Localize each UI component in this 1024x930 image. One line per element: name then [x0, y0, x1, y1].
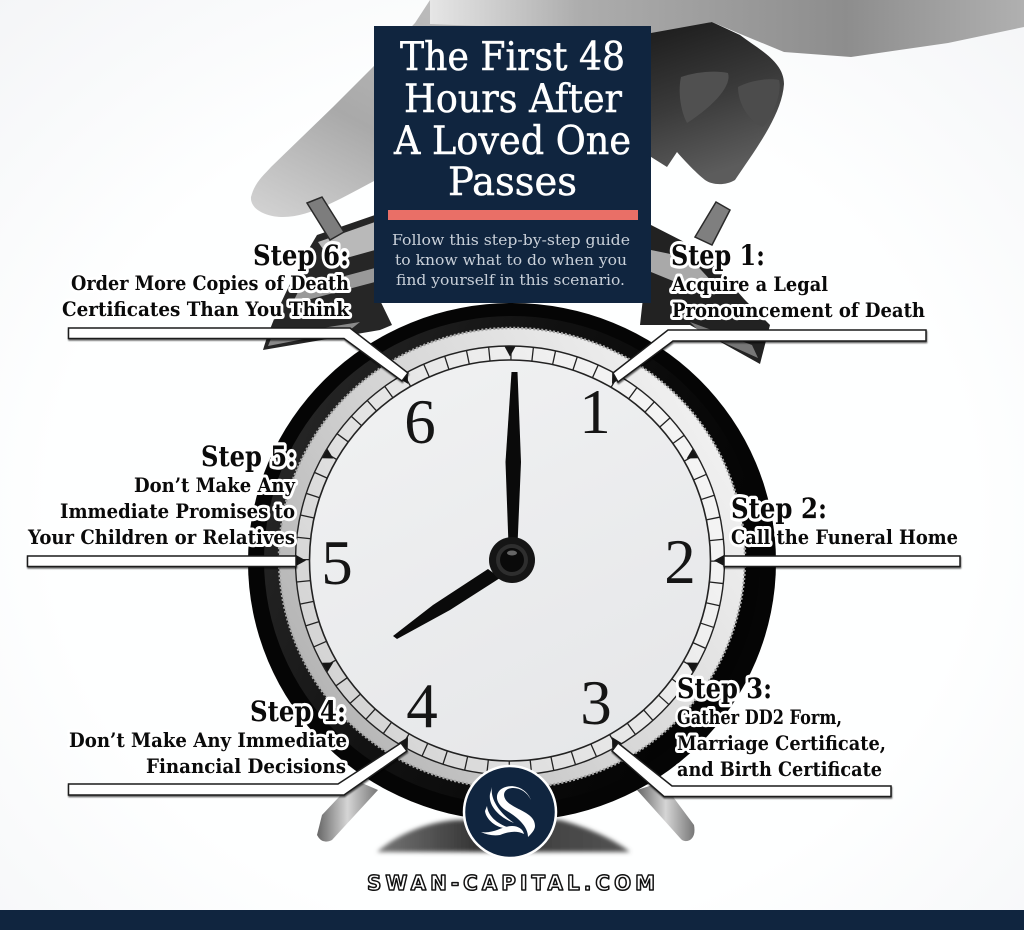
clock inner dark band: [264, 316, 760, 804]
step 2: Step 2:: [731, 492, 827, 525]
clock shadow: [377, 820, 630, 852]
fingers: [640, 22, 784, 184]
step 3: Step 3:: [677, 672, 772, 705]
website URL: SWAN-CAPITAL.COM: [367, 871, 655, 895]
step 3: Gather DD2 Form,: [677, 706, 842, 729]
step 6: Order More Copies of Death: [71, 272, 349, 295]
step 4: Financial Decisions: [146, 755, 346, 778]
clock foot left: [317, 780, 378, 842]
arrow: step 5: [28, 556, 296, 566]
clock outer black ring: [248, 303, 776, 821]
step 3: and Birth Certificate: [677, 758, 882, 781]
minute hand: [506, 372, 521, 545]
step 1: Pronouncement of Death: [672, 299, 925, 322]
title text: [393, 35, 631, 205]
red divider: [388, 210, 638, 220]
logo badge: [464, 766, 556, 858]
step 5: Immediate Promises to: [60, 500, 295, 523]
bell body: [263, 215, 392, 350]
numerals: 1: [579, 377, 611, 447]
step 6: [62, 239, 408, 381]
arm: [430, 0, 1024, 57]
title text: The First 48: [400, 35, 625, 80]
numerals: 4: [406, 671, 438, 741]
step 5: [27, 440, 296, 566]
numerals: 6: [404, 387, 436, 457]
tick track: [296, 346, 724, 775]
step 5: Your Children or Relatives: [27, 526, 295, 549]
arrow: step 4: [68, 743, 407, 795]
step 2: Call the Funeral Home: [731, 526, 958, 549]
step 4: Step 4:: [250, 695, 346, 728]
alarm clock: [248, 303, 776, 821]
arrow: step 6: [68, 328, 408, 381]
step 6: Certificates Than You Think: [62, 298, 349, 321]
numerals: 5: [321, 528, 353, 598]
clock foot right: [637, 782, 694, 841]
step 6: Step 6:: [253, 239, 349, 272]
step 5: Step 5:: [201, 440, 296, 473]
silver bezel: [279, 328, 745, 788]
bell knob: [695, 202, 730, 245]
subtitle: Follow this step-by-step guide: [392, 231, 630, 249]
step 4: Don’t Make Any Immediate: [69, 729, 347, 752]
step 1: Acquire a Legal: [671, 273, 828, 296]
footer bar: [0, 910, 1024, 930]
bell body: [640, 225, 770, 364]
hour hand: [393, 569, 500, 639]
arrow: step 3: [612, 743, 891, 796]
icon: swan S: [481, 786, 535, 837]
thumb: [251, 0, 660, 217]
step 5: Don’t Make Any: [134, 474, 296, 497]
step 2: [724, 492, 960, 566]
subtitle: [392, 231, 630, 289]
title text: Passes: [448, 160, 577, 205]
photo: hand holding clock: [251, 0, 1024, 217]
subtitle: find yourself in this scenario.: [396, 271, 625, 289]
arrow: step 2: [724, 556, 960, 566]
step 1: Step 1:: [671, 239, 765, 272]
title text: Hours After: [404, 77, 622, 122]
bell knob: [307, 197, 344, 240]
step 4: [68, 695, 407, 795]
step 1: [613, 239, 926, 382]
step 3: [612, 672, 891, 796]
title panel: [374, 26, 651, 303]
numerals: 3: [580, 668, 612, 738]
step 3: Marriage Certificate,: [677, 732, 886, 755]
hour triangles: [296, 346, 724, 774]
photo: left alarm bell: [263, 197, 392, 350]
arrow: step 1: [613, 330, 926, 382]
finger nail 1: [680, 72, 729, 123]
clock face: [310, 360, 710, 761]
title text: A Loved One: [393, 119, 631, 164]
numerals: 2: [664, 527, 696, 597]
subtitle: to know what to do when you: [395, 251, 627, 269]
centre hub: [489, 537, 535, 583]
photo: right alarm bell: [640, 202, 770, 364]
finger nail 2: [738, 79, 780, 127]
numerals: [321, 377, 696, 741]
